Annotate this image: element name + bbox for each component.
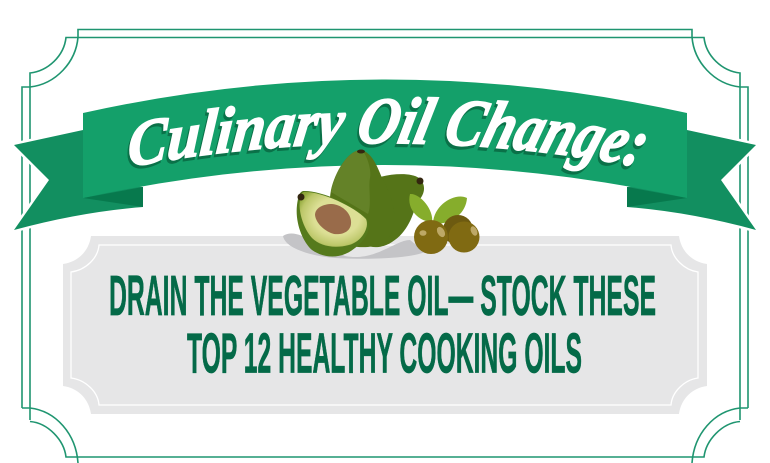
halved avocado	[297, 191, 369, 257]
standing whole avocado	[330, 150, 394, 247]
ribbon banner	[14, 80, 756, 230]
icon: avocados	[283, 150, 425, 259]
left ribbon fold	[83, 187, 143, 207]
right leaf	[433, 196, 467, 223]
title: Culinary Oil Change:	[129, 96, 646, 172]
icon: olives	[409, 194, 480, 254]
rear olive	[443, 215, 473, 245]
left ribbon tail	[14, 130, 143, 230]
avocado shadow	[283, 234, 425, 259]
right olive	[448, 222, 480, 252]
grey subtitle panel	[63, 236, 707, 414]
right ribbon fold	[627, 187, 687, 207]
left leaf	[409, 194, 432, 222]
left olive	[414, 220, 448, 254]
ribbon main band	[83, 80, 687, 198]
title: Culinary Oil Change:	[128, 100, 644, 175]
right ribbon tail	[627, 130, 756, 230]
rear whole avocado	[360, 174, 424, 247]
subtitle	[109, 264, 656, 386]
